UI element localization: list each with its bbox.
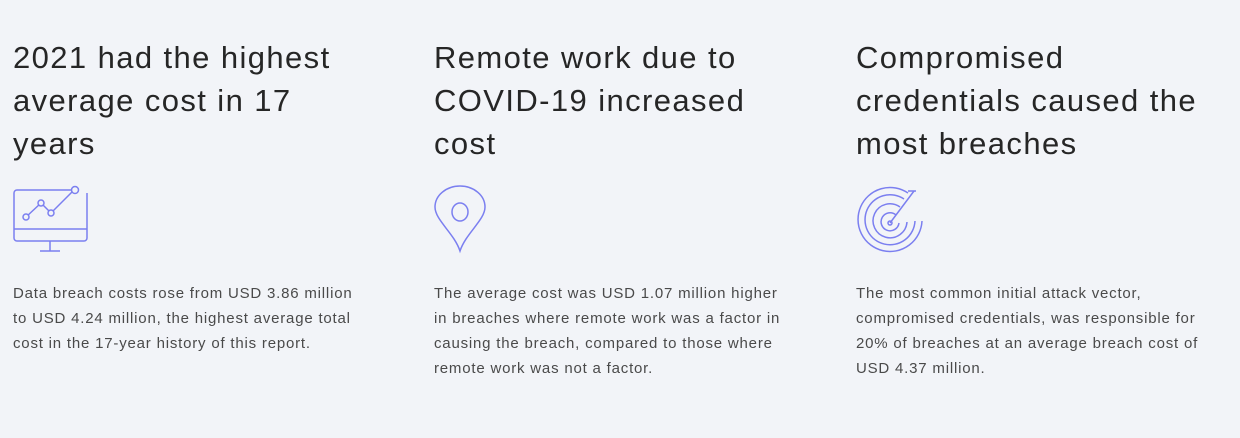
- heading: years: [13, 126, 96, 161]
- icon: target: [857, 186, 923, 252]
- body text: cost in the 17-year history of this report.: [13, 335, 311, 352]
- body text: in breaches where remote work was a factor in: [434, 310, 780, 327]
- heading: [13, 40, 331, 161]
- heading: credentials caused the: [856, 83, 1197, 118]
- body text: to USD 4.24 million, the highest average total: [13, 310, 351, 327]
- icon: map pin: [434, 185, 486, 254]
- body text: The most common initial attack vector,: [856, 285, 1142, 302]
- body text: compromised credentials, was responsible for: [856, 310, 1196, 327]
- body text: 20% of breaches at an average breach cost of: [856, 335, 1198, 352]
- panel: remote work: [434, 40, 780, 377]
- heading: [434, 40, 745, 161]
- body text: [434, 285, 780, 377]
- body text: causing the breach, compared to those where: [434, 335, 773, 352]
- body text: Data breach costs rose from USD 3.86 million: [13, 285, 352, 302]
- body text: The average cost was USD 1.07 million higher: [434, 285, 778, 302]
- heading: average cost in 17: [13, 83, 292, 118]
- body text: remote work was not a factor.: [434, 360, 653, 377]
- heading: Remote work due to: [434, 40, 737, 75]
- body text: USD 4.37 million.: [856, 360, 985, 377]
- heading: COVID-19 increased: [434, 83, 745, 118]
- heading: 2021 had the highest: [13, 40, 331, 75]
- heading: cost: [434, 126, 496, 161]
- panel: highest cost: [13, 40, 352, 352]
- body text: [13, 285, 352, 352]
- heading: Compromised: [856, 40, 1064, 75]
- icon: monitor chart: [13, 186, 88, 252]
- heading: [856, 40, 1197, 161]
- panel: credentials: [856, 40, 1198, 377]
- body text: [856, 285, 1198, 377]
- heading: most breaches: [856, 126, 1078, 161]
